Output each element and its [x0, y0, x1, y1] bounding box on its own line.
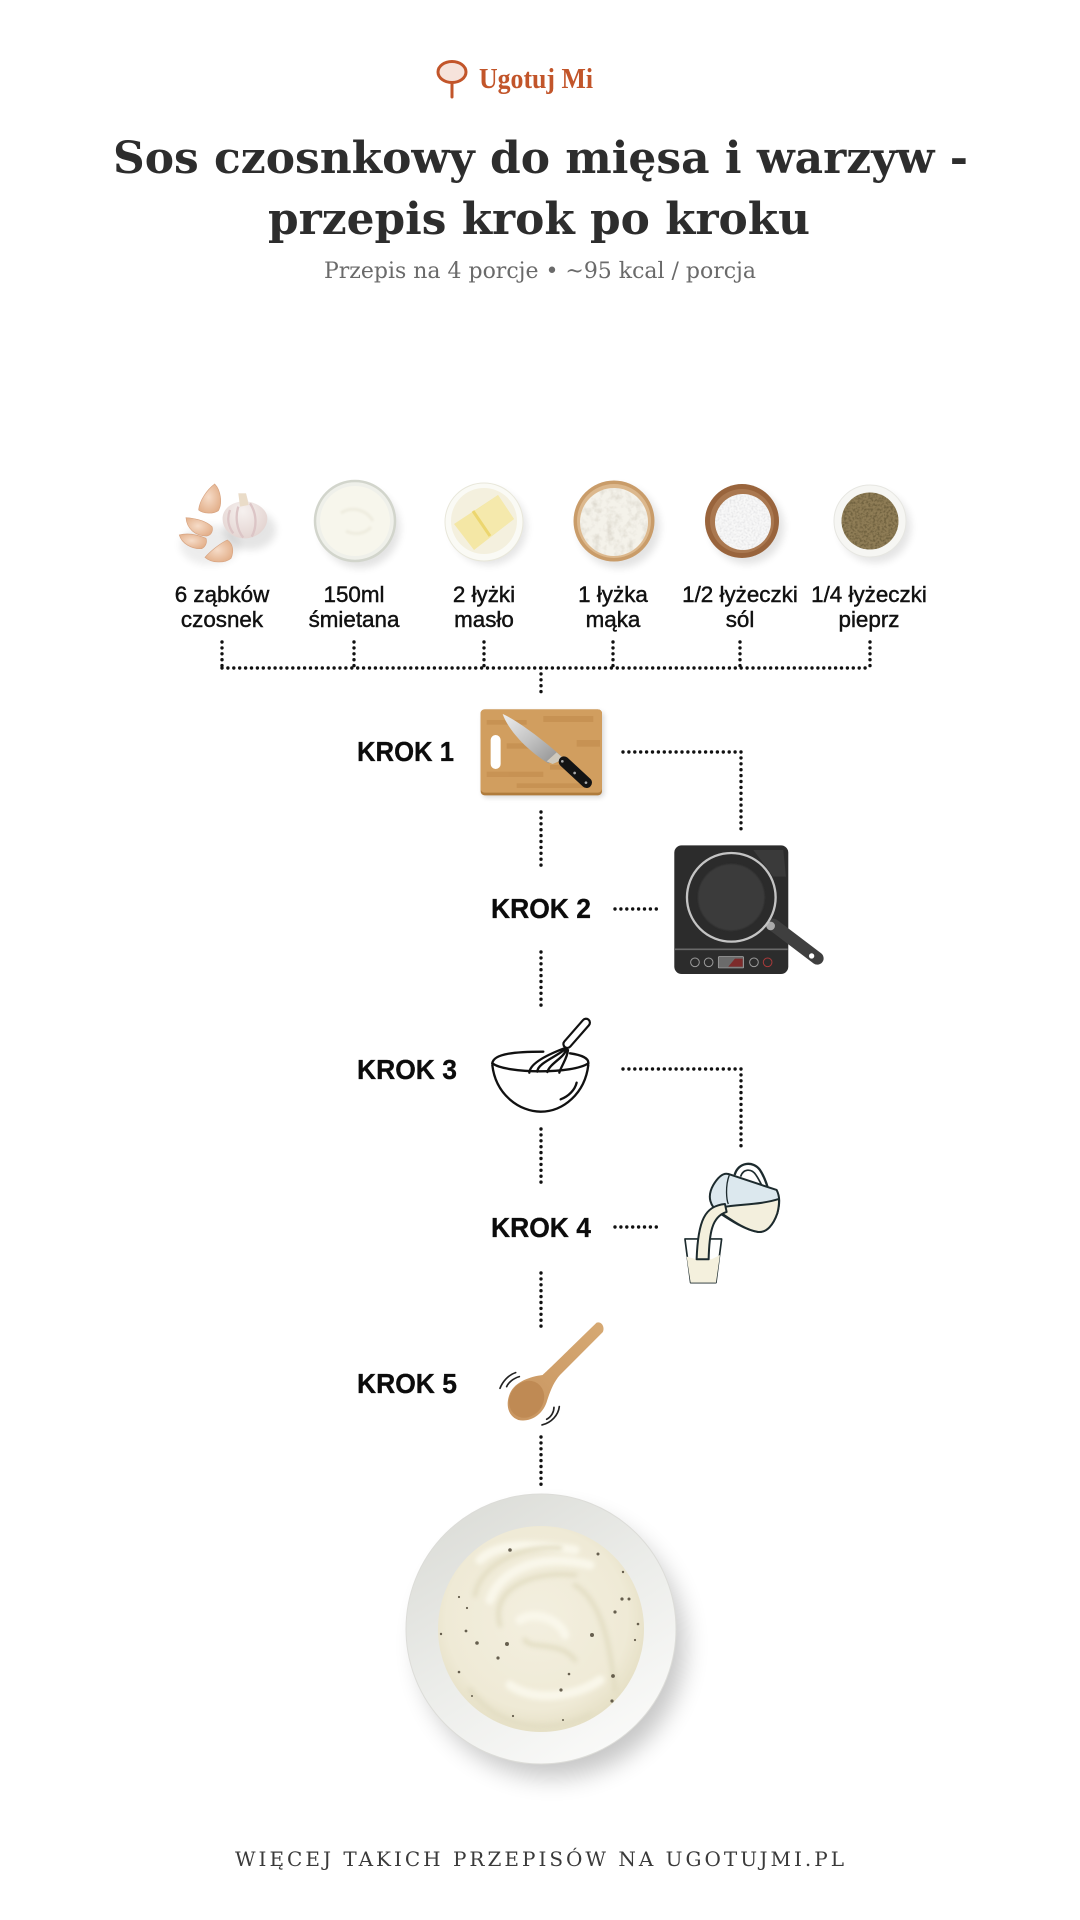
ingredient: garlic [179, 484, 276, 565]
title [113, 133, 968, 245]
ingredient labels: 1/2 łyżeczki [682, 582, 798, 607]
step 3 label: KROK 3 [357, 1054, 457, 1085]
ingredient: butter [445, 483, 527, 565]
step 4 label: KROK 4 [491, 1212, 591, 1243]
infographic canvas [116, 60, 966, 1870]
ingredient labels: masło [454, 607, 514, 632]
icon: bowl and whisk [492, 1023, 588, 1112]
icon: cutting board and knife [481, 709, 604, 797]
ingredient labels: 150ml [324, 582, 384, 607]
ingredient: pepper [834, 485, 911, 563]
ingredient labels: 2 łyżki [453, 582, 515, 607]
ingredient labels: czosnek [181, 607, 264, 632]
ingredient: cream bowl [315, 481, 400, 568]
icon: jug pouring into glass [685, 1164, 779, 1283]
ingredient labels [175, 582, 927, 632]
finished sauce in bowl [406, 1494, 685, 1778]
ingredient labels: 1/4 łyżeczki [811, 582, 927, 607]
footer: WIĘCEJ TAKICH PRZEPISÓW NA UGOTUJMI.PL [235, 1846, 844, 1871]
icon: induction hob with pan [674, 845, 817, 974]
step 1 label: KROK 1 [357, 736, 454, 767]
step 5 label: KROK 5 [357, 1368, 457, 1399]
step 2 label: KROK 2 [491, 893, 591, 924]
ingredient labels: 6 ząbków [175, 582, 270, 607]
ingredient labels: 1 łyżka [578, 582, 648, 607]
dotted connectors [222, 642, 871, 1485]
title: przepis krok po kroku [268, 194, 810, 245]
ingredient: flour [574, 480, 660, 568]
ingredient: salt [705, 484, 784, 564]
ingredient labels: śmietana [309, 607, 400, 632]
ingredient labels: sól [726, 607, 754, 632]
subtitle: Przepis na 4 porcje • ~95 kcal / porcja [324, 259, 756, 284]
ingredient labels: mąka [586, 607, 641, 632]
ingredient labels: pieprz [839, 607, 899, 632]
title: Sos czosnkowy do mięsa i warzyw - [113, 133, 968, 184]
pepper specks [440, 1548, 639, 1721]
logo wordmark: Ugotuj Mi [479, 64, 593, 95]
icon: wooden spoon [500, 1322, 604, 1425]
logo [438, 62, 593, 97]
icon: spoon logo mark [438, 62, 466, 97]
